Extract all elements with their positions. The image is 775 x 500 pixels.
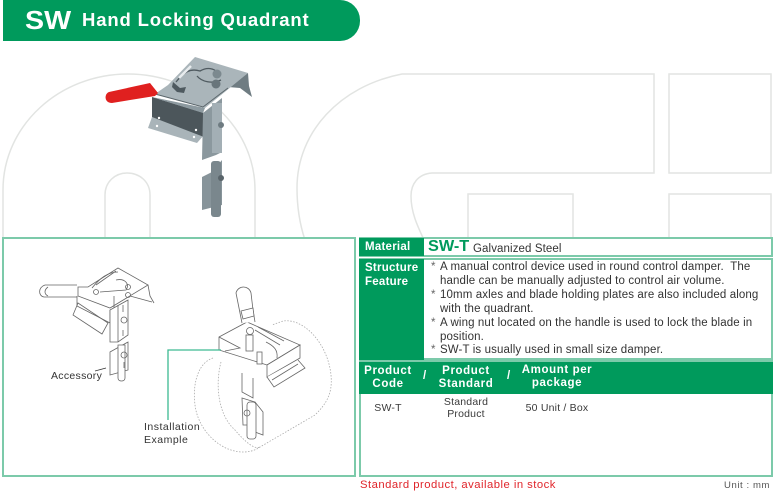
material code: SW-T (428, 238, 469, 255)
icon: front plate (152, 97, 204, 137)
column: amount per package (522, 364, 592, 389)
icon: upper axle (202, 98, 222, 160)
icon: slot and wing nut (176, 69, 221, 82)
feature list: A wing nut located on the handle is used to lock the blade in (440, 316, 752, 328)
column: product standard: Product (442, 365, 490, 377)
feature label: Feature (365, 276, 408, 288)
table header (359, 362, 773, 394)
icon: mounting flange (148, 117, 204, 143)
product code: SW (25, 5, 71, 35)
feature label (359, 259, 424, 360)
stock note: Standard product, available in stock (360, 479, 556, 491)
icon: right tab (228, 73, 252, 97)
title banner (3, 0, 360, 41)
panel: illustrations (2, 237, 356, 477)
label: accessory: Accessory (51, 370, 102, 382)
feature list: handle can be manually adjusted to control air volume. (440, 275, 725, 287)
value: standard: Product (447, 408, 485, 420)
value: standard: Standard (444, 396, 488, 408)
arrow: accessory pointer (95, 368, 106, 371)
feature label: Structure (365, 262, 418, 274)
column: product code: Code (372, 378, 404, 390)
label: installation example (144, 421, 200, 446)
icon: top plate (155, 57, 248, 108)
value: code: SW-T (374, 402, 402, 414)
table header: / (423, 370, 427, 382)
material label: Material (365, 241, 410, 253)
column: product standard: Standard (439, 378, 493, 390)
column: amount per package: package (532, 377, 582, 389)
line drawing: installation example (194, 286, 332, 452)
feature list: 10mm axles and blade holding plates are also included along (440, 289, 758, 301)
icon: red handle (106, 83, 158, 103)
unit note: Unit : mm (724, 480, 770, 491)
value: amount: 50 Unit / Box (526, 402, 588, 414)
product illustration: quadrant (106, 57, 252, 217)
panel: structure feature: * (431, 316, 436, 328)
panel: product table (359, 360, 773, 477)
column: product code (364, 365, 412, 390)
feature list: position. (440, 330, 484, 342)
feature list: A manual control device used in round control damper. The (440, 261, 750, 273)
label: installation example: Installation (144, 421, 200, 433)
panel: structure feature: * (431, 344, 436, 356)
leader line: installation example (167, 349, 221, 420)
background watermark (2, 73, 772, 237)
column: amount per package: Amount per (522, 364, 592, 376)
product title: Hand Locking Quadrant (82, 9, 310, 30)
value: standard (444, 396, 488, 420)
icon: lower axle (202, 160, 222, 210)
feature list: SW-T is usually used in small size damper. (440, 344, 663, 356)
feature list: with the quadrant. (440, 303, 534, 315)
material description: Galvanized Steel (473, 243, 562, 255)
panel: structure feature: * (431, 261, 436, 273)
panel: structure feature: * (431, 289, 436, 301)
feature list (431, 261, 758, 356)
column: product standard (439, 365, 493, 390)
column: product code: Product (364, 365, 412, 377)
material label (359, 238, 424, 256)
panel: material (359, 237, 773, 257)
line drawing: accessory quadrant (39, 268, 154, 382)
label: installation example: Example (144, 434, 188, 446)
table header: / (507, 370, 511, 382)
panel: structure feature (359, 258, 773, 360)
